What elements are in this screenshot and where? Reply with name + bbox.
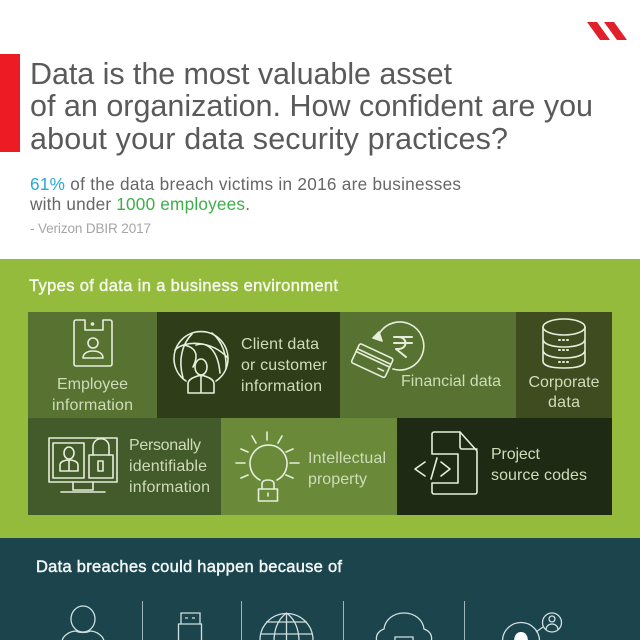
tile: corporate data: Corporate	[528, 374, 600, 391]
icon: id badge	[74, 320, 112, 366]
tile: personally identifiable information: identifiable	[129, 458, 207, 475]
icon: cloud	[376, 613, 432, 640]
tile: employee information	[28, 312, 157, 418]
tile: project source codes	[397, 418, 612, 515]
title: of an organization. How confident are you	[30, 89, 593, 123]
tile: financial data	[340, 312, 516, 418]
icon: monitor with person and lock	[49, 438, 117, 492]
logo	[587, 22, 627, 40]
icon: person	[62, 606, 104, 640]
tile: personally identifiable information: Personally	[129, 437, 201, 454]
icon: connected users	[502, 613, 562, 640]
heading: data breaches: Data breaches could happen because of	[36, 558, 342, 576]
icon: bulb and lock	[236, 432, 299, 501]
tile: corporate data: data	[548, 394, 580, 411]
tile: client data: Client data	[241, 336, 319, 353]
source: - Verizon DBIR 2017	[30, 221, 151, 236]
icon: database	[543, 319, 585, 368]
statistic text: with under 1000 employees.	[29, 194, 250, 214]
tile: personally identifiable information: information	[129, 479, 210, 496]
tile: intellectual property: Intellectual	[308, 450, 386, 467]
tile: employee information: information	[52, 397, 133, 414]
dividers	[142, 601, 464, 640]
tile: financial data: Financial data	[401, 373, 501, 390]
icon: globe	[260, 613, 313, 640]
icon: rupee and card	[351, 322, 424, 378]
title: about your data security practices?	[30, 122, 508, 156]
tile: client data: information	[241, 378, 322, 395]
tile: intellectual property: property	[308, 471, 367, 488]
icon: usb drive	[178, 613, 202, 640]
icon: globe and person	[174, 332, 228, 393]
tile: personally identifiable information	[28, 418, 221, 515]
icon: code file	[415, 432, 477, 494]
statistic text	[29, 174, 461, 214]
statistic text: 61% of the data breach victims in 2016 are businesses	[30, 174, 461, 194]
title: Data is the most valuable asset	[30, 57, 453, 91]
panel: types of data	[0, 259, 640, 538]
tile: client data: or customer	[241, 357, 328, 374]
tile: project source codes: source codes	[491, 467, 587, 484]
tile: client data	[157, 312, 340, 418]
red accent bar	[0, 54, 20, 152]
tile: intellectual property	[221, 418, 397, 515]
title	[30, 57, 593, 156]
heading: types of data: Types of data in a business environment	[29, 277, 338, 295]
tile: corporate data	[516, 312, 612, 418]
tile: project source codes: Project	[491, 446, 541, 463]
panel: data breaches	[0, 538, 640, 640]
tile: employee information: Employee	[57, 376, 128, 393]
